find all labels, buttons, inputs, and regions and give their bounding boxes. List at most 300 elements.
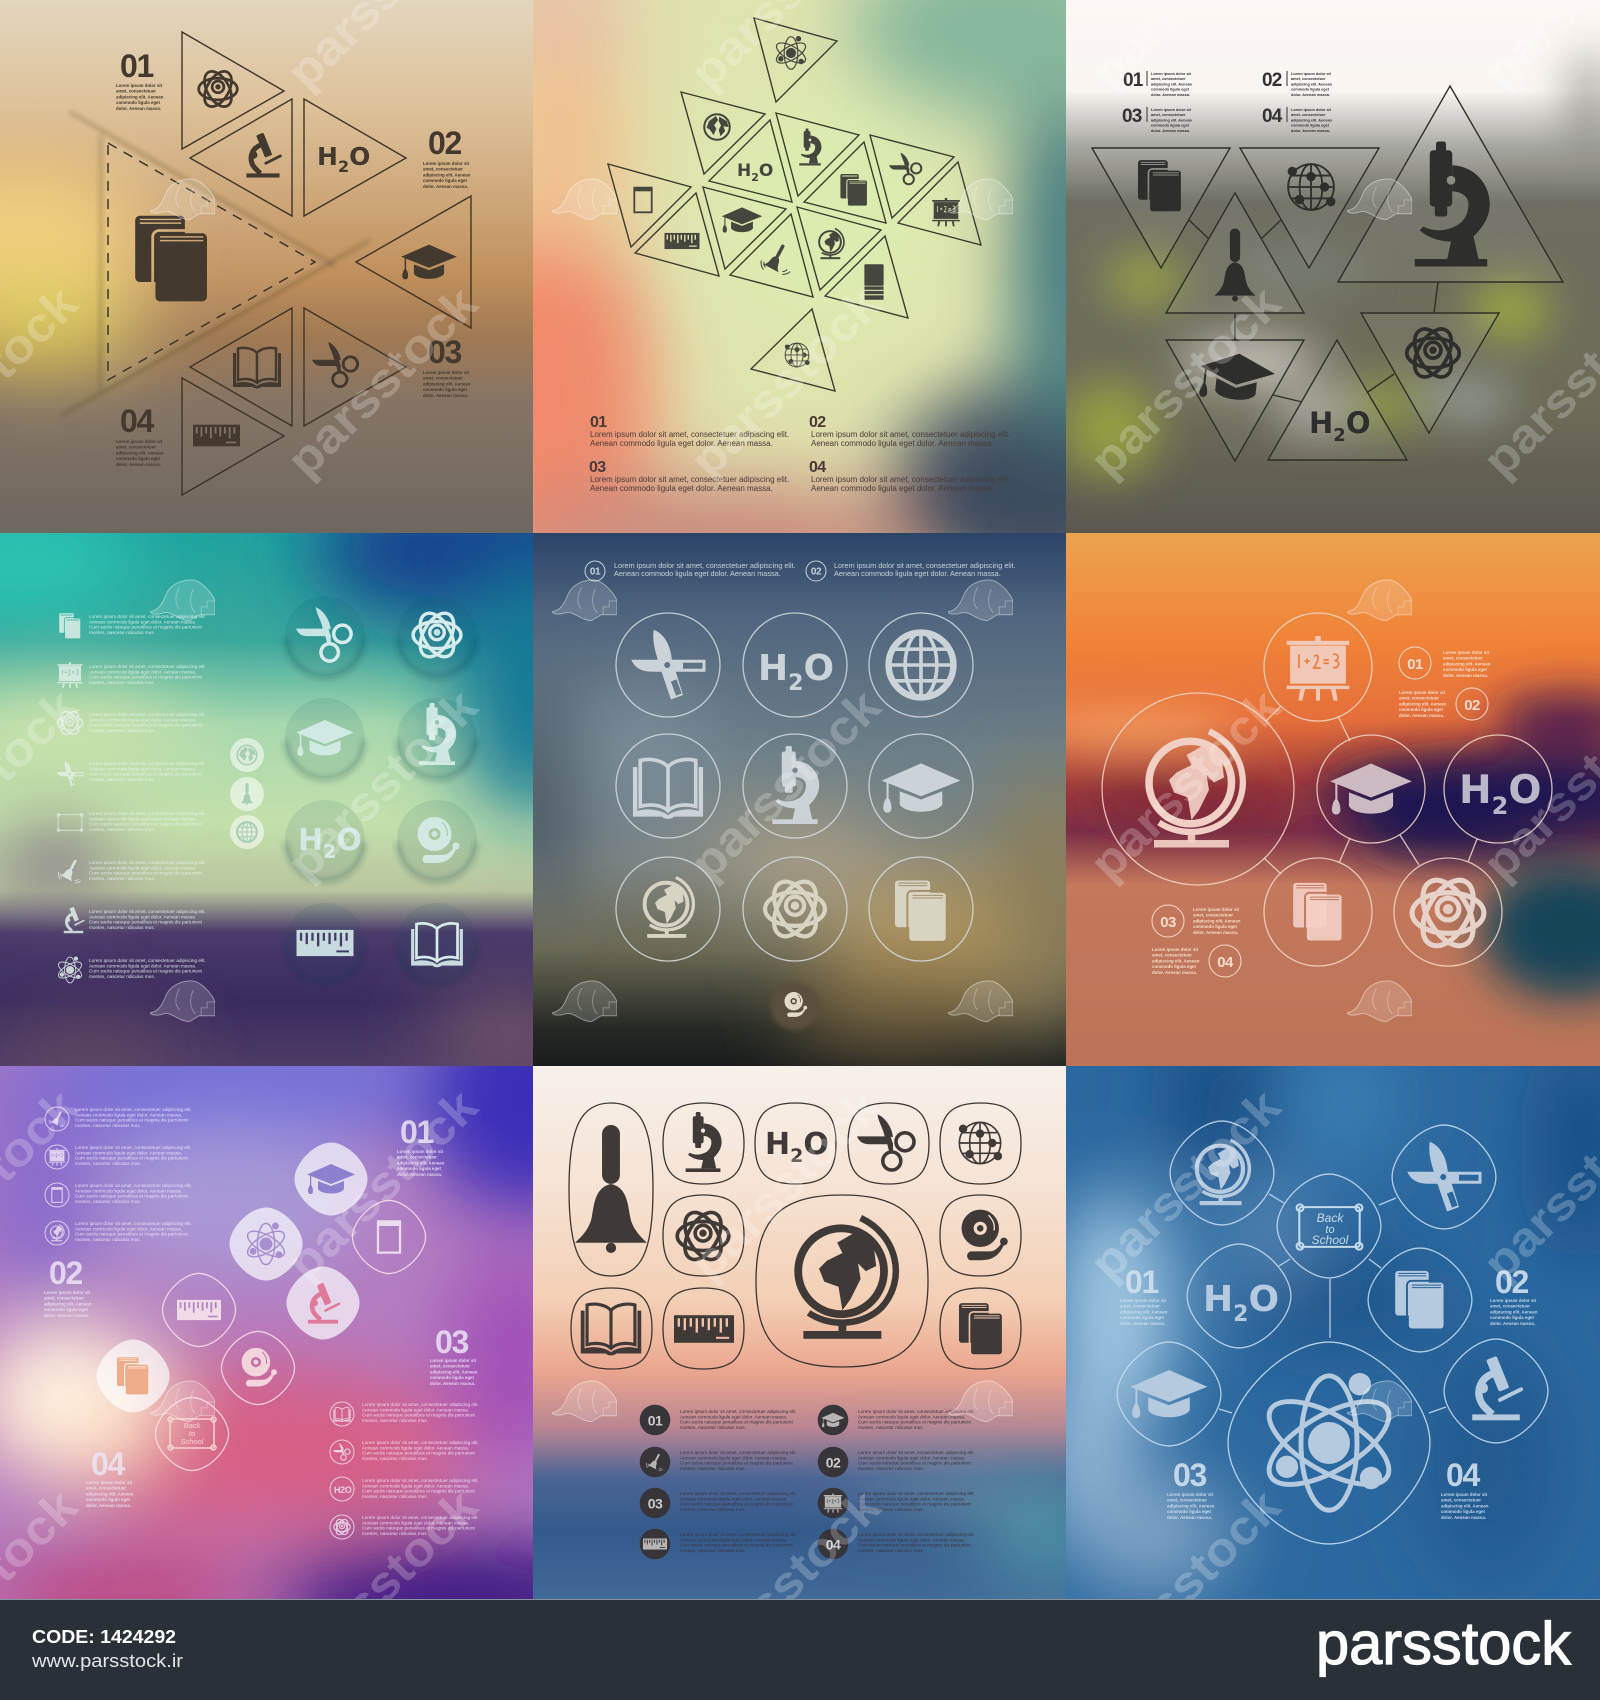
icons [633,36,960,367]
list text: Cum sociis natoque penatibus et magnis dis parturient [89,772,203,777]
list text: Lorem ipsum dolor sit amet, consectetuer adipiscing elit. [75,1107,192,1112]
numbers and captions: commodo ligula eget [430,1375,474,1380]
numbered captions: Lorem ipsum dolor sit [1291,108,1332,112]
watermark: parsstock text grid: parsstock [1080,277,1291,488]
numbered captions: Aenean commodo ligula eget dolor. Aenean massa. [590,484,773,493]
icon: back to school sign: Back [184,1421,202,1430]
numbers and captions: 01 [1125,1264,1159,1300]
numbered captions: dolor. Aenean massa. [1291,93,1330,97]
numbered captions: Lorem ipsum dolor sit [1443,650,1490,655]
numbered captions: adipiscing elit. Aenean [116,450,164,455]
numbered captions: commodo ligula eget [1193,924,1237,929]
numbered captions: 01 [120,48,154,84]
list text: montes, nascetur ridiculus mus. [89,630,155,635]
numbered captions: commodo ligula eget [1399,707,1443,712]
icons: 2 [1233,1302,1248,1327]
list text: montes, nascetur ridiculus mus. [75,1199,141,1204]
numbered captions: commodo ligula eget [116,100,160,105]
outlined blobs [155,1200,426,1471]
numbered captions: Aenean commodo ligula eget dolor. Aenean massa. [590,439,773,448]
icons [1131,1140,1521,1510]
list text: montes, nascetur ridiculus mus. [858,1507,924,1512]
top captions [585,561,1016,581]
list text [89,614,206,979]
numbered captions: adipiscing elit. Aenean [116,94,164,99]
small list badges [45,1107,354,1539]
list text: montes, nascetur ridiculus mus. [89,777,155,782]
panel: connected blobs on blue [1040,1025,1600,1600]
list text: Aenean commodo ligula eget dolor. Aenean massa. [75,1226,182,1231]
background: warm tan blur [0,0,533,533]
numbers and captions: 04 [1446,1457,1481,1493]
numbers and captions: Lorem ipsum dolor sit [44,1290,91,1295]
numbered captions: dolor. Aenean massa. [1399,713,1444,718]
list text: montes, nascetur ridiculus mus. [89,925,155,930]
list text: Lorem ipsum dolor sit amet, consectetuer adipiscing elit. [75,1145,192,1150]
background: teal green purple blur [0,475,690,1075]
panel: blobs on violet and pink [0,975,650,1660]
list text: Aenean commodo ligula eget dolor. Aenean massa. [362,1407,469,1412]
icons: 2 [790,1145,803,1167]
watermark: parsstock text grid: parsstock [680,1080,891,1291]
numbered captions: 04 [1262,106,1283,127]
numbers and captions: adipiscing elit. Aenean [430,1369,478,1374]
icons: H [737,161,751,181]
panel: triangle mosaic [533,0,1066,533]
icons: H [298,823,323,858]
numbers and captions [1120,1264,1538,1520]
numbered captions: 04 [809,459,826,476]
numbered captions: commodo ligula eget [1443,667,1487,672]
icons [631,630,960,824]
icons: lower row [645,875,946,943]
numbers and captions: Lorem ipsum dolor sit [1441,1492,1488,1497]
list text: Lorem ipsum dolor sit amet, consectetuer adipiscing elit. [858,1532,975,1537]
numbers and captions: dolor. Aenean massa. [397,1172,442,1177]
list text: Cum sociis natoque penatibus et magnis dis parturient [89,675,203,680]
watermark: parsstock text grid: parsstock [277,1080,488,1291]
numbered captions: Lorem ipsum dolor sit [1151,72,1192,76]
icons [1149,636,1542,954]
icons: H [1309,406,1333,440]
numbers and captions: adipiscing elit. Aenean [86,1491,134,1496]
list text: Lorem ipsum dolor sit amet, consectetuer adipiscing elit. [858,1409,975,1414]
numbers and captions: dolor. Aenean massa. [1441,1515,1486,1520]
list text: Cum sociis natoque penatibus et magnis dis parturient [680,1461,794,1466]
list text: Aenean commodo ligula eget dolor. Aenean massa. [858,1414,965,1419]
triangle outlines [1092,86,1563,461]
watermark: parsstock text grid: parsstock [277,277,488,488]
icons: 2 [751,171,759,184]
numbers and captions: 03 [435,1324,469,1360]
background: bright sky over green blur [1060,0,1600,533]
badge contents: 03 [648,1496,663,1512]
numbers and captions: amet, consectetuer [1490,1304,1530,1309]
numbered captions: commodo ligula eget [1291,124,1330,128]
numbers and captions: Lorem ipsum dolor sit [86,1480,133,1485]
list text: montes, nascetur ridiculus mus. [362,1456,428,1461]
icon: back to school sign: School [181,1437,204,1446]
list text: Lorem ipsum dolor sit amet, consectetuer adipiscing elit. [89,860,206,865]
watermark: parsstock text grid: parsstock [1080,1480,1291,1691]
list text: Aenean commodo ligula eget dolor. Aenean massa. [362,1445,469,1450]
numbers and captions: adipiscing elit. Aenean [1441,1503,1489,1508]
list text: Lorem ipsum dolor sit amet, consectetuer adipiscing elit. [362,1515,479,1520]
icons: O [336,823,362,858]
list text: Aenean commodo ligula eget dolor. Aenean massa. [362,1483,469,1488]
list text: montes, nascetur ridiculus mus. [362,1494,428,1499]
list text: Lorem ipsum dolor sit amet, consectetuer adipiscing elit. [75,1221,192,1226]
list text: Lorem ipsum dolor sit amet, consectetuer adipiscing elit. [89,614,206,619]
numbered captions: dolor. Aenean massa. [1443,673,1488,678]
list text: Lorem ipsum dolor sit amet, consectetuer adipiscing elit. [362,1402,479,1407]
icon: back to school sign: to [189,1429,195,1438]
numbered captions: dolor. Aenean massa. [116,462,161,467]
numbered captions: Aenean commodo ligula eget dolor. Aenean massa. [811,439,994,448]
list text: montes, nascetur ridiculus mus. [89,728,155,733]
list text: Lorem ipsum dolor sit amet, consectetuer adipiscing elit. [89,761,206,766]
list text: Lorem ipsum dolor sit amet, consectetuer adipiscing elit. [89,909,206,914]
numbered captions: dolor. Aenean massa. [1151,93,1190,97]
numbered captions: amet, consectetuer [116,445,156,450]
icons: H [765,1127,790,1162]
rounded square outlines [569,1103,1021,1369]
icons: H [1203,1279,1233,1320]
numbers and captions: adipiscing elit. Aenean [397,1160,445,1165]
icon: back to school board: School [1312,1233,1349,1247]
icons: O [1248,1279,1279,1320]
list text: Aenean commodo ligula eget dolor. Aenean massa. [858,1455,965,1460]
top captions: 02 [811,566,822,578]
list text: Aenean commodo ligula eget dolor. Aenean massa. [680,1414,787,1419]
numbers and captions: Lorem ipsum dolor sit [430,1358,477,1363]
numbers and captions: amet, consectetuer [86,1486,126,1491]
connectors [1189,220,1438,402]
list text: Cum sociis natoque penatibus et magnis dis parturient [89,871,203,876]
numbers and captions: 02 [1495,1264,1529,1300]
list text: montes, nascetur ridiculus mus. [89,827,155,832]
list text: Aenean commodo ligula eget dolor. Aenean massa. [89,669,196,674]
list text: Cum sociis natoque penatibus et magnis dis parturient [680,1420,794,1425]
list text: Cum sociis natoque penatibus et magnis dis parturient [858,1502,972,1507]
numbered captions: dolor. Aenean massa. [116,106,161,111]
icons: O [803,1127,829,1162]
triangle outlines [182,32,471,495]
numbered captions: amet, consectetuer [1291,77,1326,81]
numbered captions: Lorem ipsum dolor sit amet, consectetuer adipiscing elit. [590,430,789,439]
list text: Cum sociis natoque penatibus et magnis dis parturient [89,969,203,974]
numbered captions: 01 [1123,70,1144,91]
numbered captions: amet, consectetuer [423,167,463,172]
list text: montes, nascetur ridiculus mus. [858,1548,924,1553]
numbers and captions: 03 [1173,1457,1207,1493]
list text: Lorem ipsum dolor sit amet, consectetuer adipiscing elit. [362,1478,479,1483]
icons: 2 [1333,425,1346,446]
badge contents: 02 [826,1454,841,1470]
numbered captions: adipiscing elit. Aenean [1193,918,1241,923]
badge contents [643,1412,845,1552]
numbers and captions: amet, consectetuer [1120,1304,1160,1309]
numbers and captions: commodo ligula eget [1167,1509,1211,1514]
background: green to salmon blur [533,0,1066,533]
list text: Cum sociis natoque penatibus et magnis dis parturient [75,1194,189,1199]
numbered captions: amet, consectetuer [1399,696,1439,701]
numbered captions: Lorem ipsum dolor sit [423,161,470,166]
numbers and captions: commodo ligula eget [1490,1315,1534,1320]
list text: Aenean commodo ligula eget dolor. Aenean massa. [75,1188,182,1193]
numbered captions: amet, consectetuer [116,89,156,94]
top captions: Aenean commodo ligula eget dolor. Aenean massa. [614,569,781,578]
numbered captions: adipiscing elit. Aenean [1291,118,1333,122]
connectors [1264,706,1477,874]
numbers and captions: commodo ligula eget [1441,1509,1485,1514]
numbers and captions: commodo ligula eget [1120,1315,1164,1320]
numbers and captions: Lorem ipsum dolor sit [1120,1298,1167,1303]
numbered captions: Lorem ipsum dolor sit [423,370,470,375]
numbered captions: 02 [1464,697,1480,714]
numbers and captions [44,1114,478,1508]
numbered captions: Lorem ipsum dolor sit [1151,108,1192,112]
numbered captions: 02 [428,125,462,161]
circle outlines [616,613,973,961]
numbers and captions: dolor. Aenean massa. [44,1313,89,1318]
alarm button [771,982,819,1030]
numbered captions: 02 [809,414,826,431]
icons [1138,142,1490,446]
numbered captions: 04 [120,403,155,439]
watermark: parsstock text grid: parsstock [277,1480,488,1691]
numbered captions: 03 [589,459,606,476]
top captions: Lorem ipsum dolor sit amet, consectetuer adipiscing elit. [614,561,796,570]
list text: montes, nascetur ridiculus mus. [75,1123,141,1128]
numbers and captions: amet, consectetuer [44,1296,84,1301]
watermark: parsstock text grid: parsstock [277,680,488,891]
list text: Cum sociis natoque penatibus et magnis dis parturient [89,920,203,925]
list text: Aenean commodo ligula eget dolor. Aenean massa. [680,1455,787,1460]
footer logo: parsstock [1316,1610,1572,1677]
list text: Cum sociis natoque penatibus et magnis dis parturient [89,625,203,630]
numbers and captions: 04 [91,1446,126,1482]
dark list badges [640,1405,848,1559]
top captions: Lorem ipsum dolor sit amet, consectetuer adipiscing elit. [834,561,1016,570]
numbered captions: adipiscing elit. Aenean [1152,958,1200,963]
icons: O [349,142,370,171]
numbers and captions: amet, consectetuer [397,1155,437,1160]
list icons [56,613,84,983]
panel: linked triangles on garden blur [1060,0,1600,533]
list text: Lorem ipsum dolor sit amet, consectetuer adipiscing elit. [680,1450,797,1455]
icons: H [758,648,788,689]
folded triangle [62,112,370,415]
numbers and captions: dolor. Aenean massa. [86,1503,131,1508]
list text: Cum sociis natoque penatibus et magnis dis parturient [89,723,203,728]
icons: O [803,648,834,689]
numbers and captions: commodo ligula eget [44,1307,88,1312]
list text: Lorem ipsum dolor sit amet, consectetuer adipiscing elit. [89,958,206,963]
watermark: parsstock text grid: parsstock [680,1480,891,1691]
numbered captions: adipiscing elit. Aenean [1443,661,1491,666]
numbers and captions: Lorem ipsum dolor sit [1490,1298,1537,1303]
numbered captions: Lorem ipsum dolor sit amet, consectetuer adipiscing elit. [811,430,1010,439]
icon: back to school board [1297,1204,1362,1250]
list text: montes, nascetur ridiculus mus. [362,1531,428,1536]
list text: montes, nascetur ridiculus mus. [89,876,155,881]
list text: Cum sociis natoque penatibus et magnis dis parturient [858,1420,972,1425]
list text: montes, nascetur ridiculus mus. [75,1237,141,1242]
background: blue vertical blur [1040,1025,1600,1600]
numbered captions: commodo ligula eget [1152,964,1196,969]
list text [680,1409,975,1553]
numbers and captions: dolor. Aenean massa. [430,1381,475,1386]
numbers and captions: commodo ligula eget [86,1497,130,1502]
numbered captions [1152,647,1491,977]
numbered captions: Lorem ipsum dolor sit amet, consectetuer adipiscing elit. [590,475,789,484]
list text: Lorem ipsum dolor sit amet, consectetuer adipiscing elit. [75,1183,192,1188]
icons [296,607,463,967]
numbered captions: amet, consectetuer [1193,913,1233,918]
list text: montes, nascetur ridiculus mus. [680,1466,746,1471]
background: violet pink glow [0,975,650,1660]
numbered captions: adipiscing elit. Aenean [1151,118,1193,122]
raised circles [285,596,477,984]
icons: 2 [1492,792,1508,820]
numbered captions: commodo ligula eget [116,456,160,461]
list text: Cum sociis natoque penatibus et magnis dis parturient [75,1118,189,1123]
icons: 2 [788,671,803,696]
numbered captions: 03 [1160,914,1176,931]
icons: O [759,161,773,181]
panel: triangles with large book [0,0,533,533]
numbered captions: 03 [1122,106,1142,127]
list text: Lorem ipsum dolor sit amet, consectetuer adipiscing elit. [680,1491,797,1496]
watermark: rhino marks [150,179,1412,1422]
list text: montes, nascetur ridiculus mus. [75,1161,141,1166]
numbers and captions: 02 [49,1255,83,1291]
panel: connected circles on sunset [1020,533,1600,1066]
list text: Cum sociis natoque penatibus et magnis dis parturient [362,1489,476,1494]
icons: O [1508,768,1542,813]
small circle badges [230,738,264,849]
list text: montes, nascetur ridiculus mus. [858,1466,924,1471]
numbered captions: adipiscing elit. Aenean [1399,701,1447,706]
numbers and captions: adipiscing elit. Aenean [44,1301,92,1306]
numbered captions: amet, consectetuer [1443,656,1483,661]
numbered captions: adipiscing elit. Aenean [1291,82,1333,86]
top captions: Aenean commodo ligula eget dolor. Aenean massa. [834,569,1001,578]
numbers and captions: Lorem ipsum dolor sit [397,1149,444,1154]
numbers and captions: dolor. Aenean massa. [1490,1321,1535,1326]
list text: Cum sociis natoque penatibus et magnis dis parturient [680,1543,794,1548]
small list icons [49,1110,352,1537]
background: navy to sand blur [505,533,1105,1066]
numbers and captions: adipiscing elit. Aenean [1120,1309,1168,1314]
list text: montes, nascetur ridiculus mus. [858,1425,924,1430]
numbered captions: Lorem ipsum dolor sit [116,83,163,88]
list text: Aenean commodo ligula eget dolor. Aenean massa. [858,1537,965,1542]
list text: Aenean commodo ligula eget dolor. Aenean massa. [89,816,196,821]
numbered captions: amet, consectetuer [1151,77,1186,81]
list text: Aenean commodo ligula eget dolor. Aenean massa. [89,914,196,919]
numbered captions: 02 [1262,70,1282,91]
panel: raised circle buttons [0,475,690,1075]
numbered captions: dolor. Aenean massa. [1151,129,1190,133]
small list icons: H2O [334,1485,352,1495]
background: orange and indigo blur [1020,533,1600,1066]
panel: nine outlined circles [505,533,1105,1066]
badge contents: 01 [648,1412,663,1428]
numbered captions: 01 [590,414,607,431]
icons [117,1164,401,1394]
list text: Cum sociis natoque penatibus et magnis dis parturient [75,1232,189,1237]
numbered captions: adipiscing elit. Aenean [1151,82,1193,86]
list text [75,1107,479,1536]
list text: Aenean commodo ligula eget dolor. Aenean massa. [89,717,196,722]
numbered captions: dolor. Aenean massa. [423,393,468,398]
list text: Cum sociis natoque penatibus et magnis dis parturient [362,1451,476,1456]
list text: montes, nascetur ridiculus mus. [89,974,155,979]
numbered captions: Lorem ipsum dolor sit amet, consectetuer adipiscing elit. [811,475,1010,484]
numbered captions: Aenean commodo ligula eget dolor. Aenean massa. [811,484,994,493]
list text: montes, nascetur ridiculus mus. [680,1548,746,1553]
numbers and captions: amet, consectetuer [1441,1498,1481,1503]
list text: Aenean commodo ligula eget dolor. Aenean massa. [89,865,196,870]
list text: montes, nascetur ridiculus mus. [680,1425,746,1430]
numbered captions: Lorem ipsum dolor sit [1193,907,1240,912]
numbered captions: dolor. Aenean massa. [1193,930,1238,935]
numbers and captions: dolor. Aenean massa. [1120,1321,1165,1326]
numbered captions: commodo ligula eget [1151,88,1190,92]
blob outlines [1117,1121,1548,1544]
numbered captions: dolor. Aenean massa. [1291,129,1330,133]
list text: Cum sociis natoque penatibus et magnis dis parturient [858,1461,972,1466]
numbers and captions: amet, consectetuer [430,1364,470,1369]
list text: Cum sociis natoque penatibus et magnis dis parturient [89,822,203,827]
footer url: www.parsstock.ir [31,1651,183,1671]
watermark: parsstock text grid: parsstock [680,680,891,891]
list text: Cum sociis natoque penatibus et magnis dis parturient [362,1413,476,1418]
icon: back to school sign [168,1417,216,1450]
icons: 2 [338,157,349,176]
icons: H [317,142,338,171]
numbered captions: amet, consectetuer [1291,113,1326,117]
filled blobs [96,1142,368,1413]
numbers and captions: dolor. Aenean massa. [1167,1515,1212,1520]
icon: back to school board: Back [1317,1211,1344,1225]
circle outlines [1102,613,1552,966]
background: cream to blue [533,1066,1120,1600]
watermark: parsstock text grid: parsstock [1080,1080,1291,1291]
numbered captions: 03 [428,334,462,370]
list text: Cum sociis natoque penatibus et magnis dis parturient [858,1543,972,1548]
list text: Aenean commodo ligula eget dolor. Aenean massa. [858,1496,965,1501]
footer bar [0,1599,1600,1700]
numbers and captions: commodo ligula eget [397,1166,441,1171]
numbered captions: commodo ligula eget [423,387,467,392]
connectors [1219,1194,1446,1413]
small badge icons [237,745,257,842]
list text: Aenean commodo ligula eget dolor. Aenean massa. [680,1496,787,1501]
triangle outlines [608,18,981,391]
list text: Lorem ipsum dolor sit amet, consectetuer adipiscing elit. [858,1450,975,1455]
list text: Cum sociis natoque penatibus et magnis dis parturient [75,1156,189,1161]
watermark: parsstock text grid: parsstock [680,277,891,488]
list text: montes, nascetur ridiculus mus. [89,680,155,685]
numbers and captions: amet, consectetuer [1167,1498,1207,1503]
numbered captions: dolor. Aenean massa. [423,184,468,189]
icons [135,67,457,446]
numbered captions [589,414,1010,493]
top captions: 01 [590,566,601,578]
